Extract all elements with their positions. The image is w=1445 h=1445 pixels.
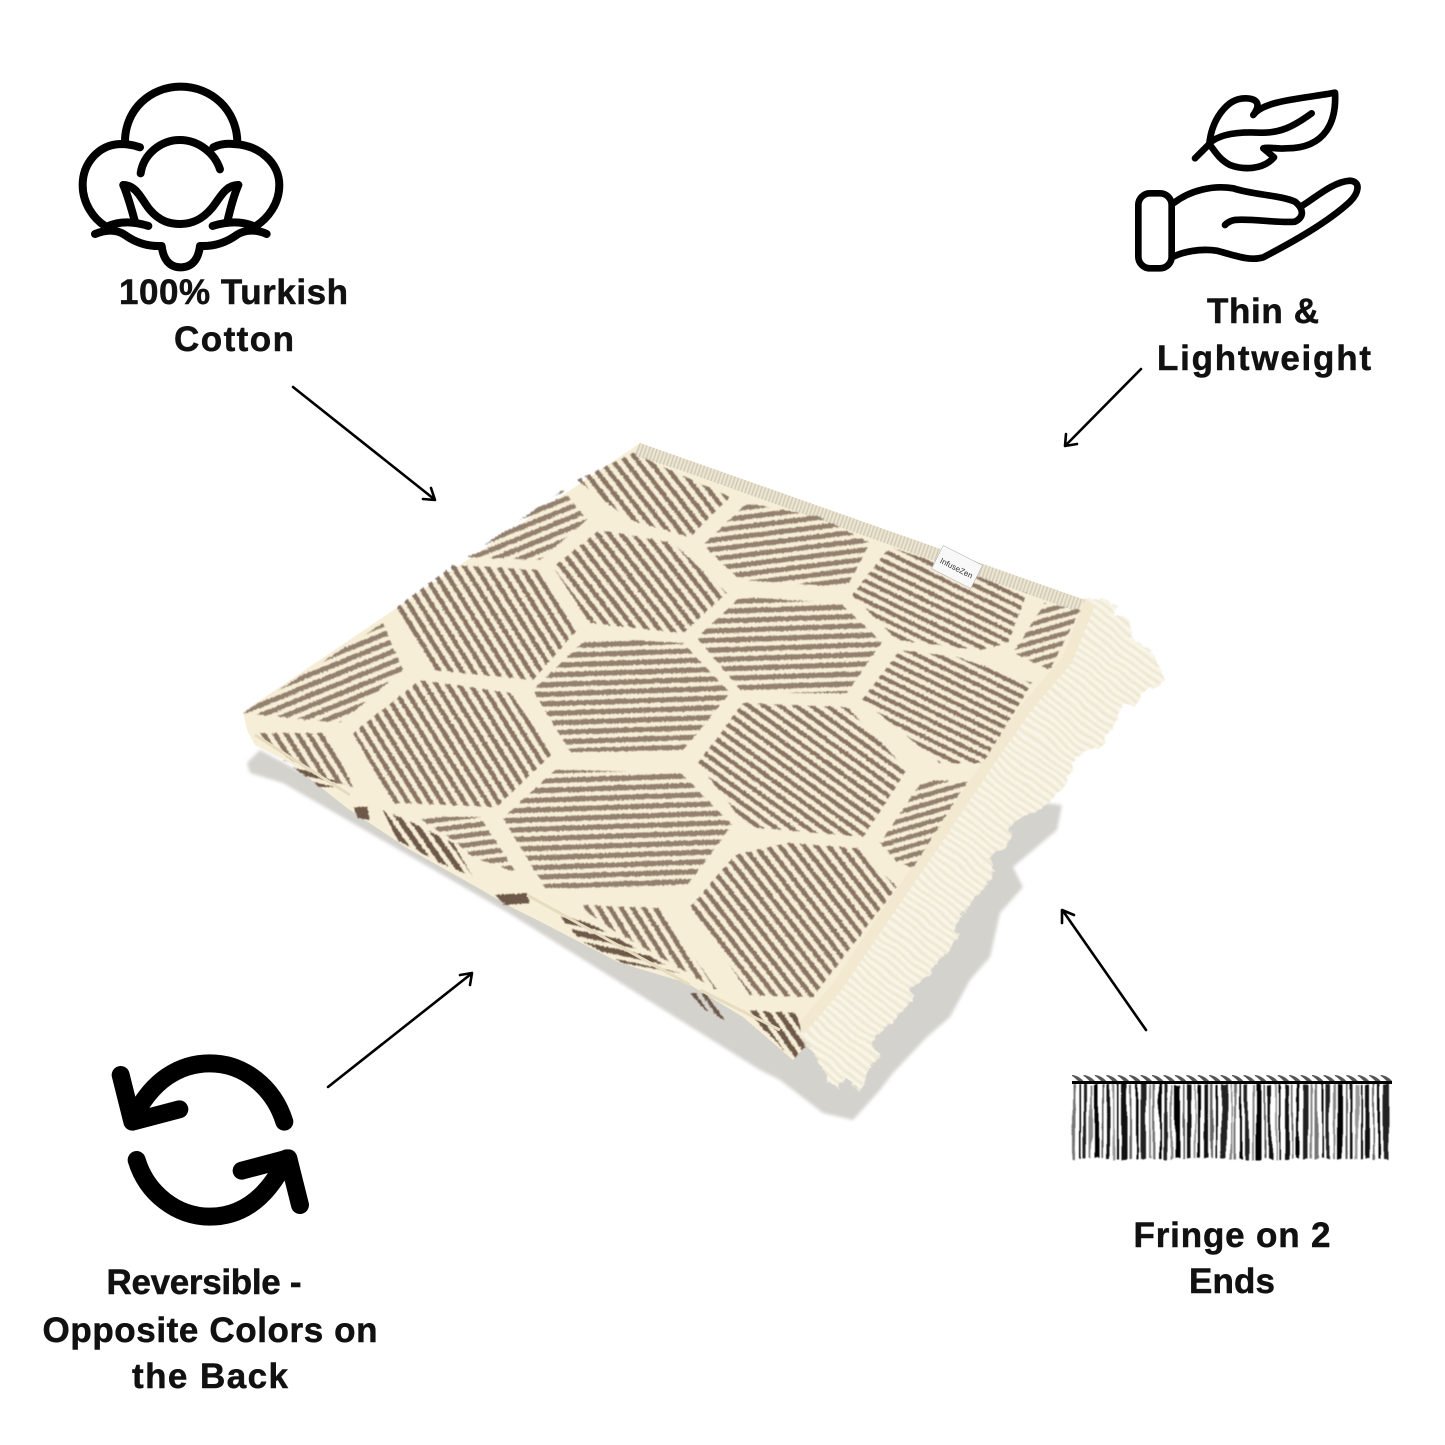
heading: Thin & Lightweight: Thin & [1207,292,1319,331]
folded layers [257,733,805,1060]
heading: Fringe on 2 Ends [1134,1216,1330,1301]
arrow: reversible to towel [328,973,472,1087]
woven brand tag [931,545,983,589]
arrow: lightweight to towel [1065,369,1141,446]
heading: Fringe on 2 Ends: Ends [1189,1262,1275,1301]
heading: Reversible [42,1263,378,1396]
heading: 100% Turkish Cotton: 100% Turkish [119,273,348,312]
honeycomb hexagons [243,453,1080,997]
icon: cotton boll [83,87,279,267]
heading: Reversible: Opposite Colors on [42,1311,378,1350]
heading: Reversible: the Back [132,1357,289,1396]
heading: Fringe on 2 Ends: Fringe on 2 [1134,1216,1330,1255]
towel photo [243,443,1170,1120]
arrow: fringe to towel [1062,910,1146,1030]
towel body [243,443,1085,1060]
arrow: cotton to towel [293,387,435,500]
heading: Thin & Lightweight: Lightweight [1157,339,1371,378]
heading: 100% Turkish Cotton [119,273,348,359]
heading: 100% Turkish Cotton: Cotton [174,320,294,359]
towel hem [800,603,1090,1030]
icon: fringe swatch [1072,1074,1392,1159]
icon: reversible arrows [121,1063,300,1217]
towel woven end [633,443,1085,612]
icon: leaf over hand [1138,93,1358,268]
heading: Thin & Lightweight [1157,292,1371,378]
heading: Reversible: Reversible - [106,1263,302,1302]
towel fringe [790,590,1170,1100]
towel cast shadow [247,750,1062,1120]
woven brand tag: InfuseZen [938,556,974,580]
fold crease [255,735,780,1030]
